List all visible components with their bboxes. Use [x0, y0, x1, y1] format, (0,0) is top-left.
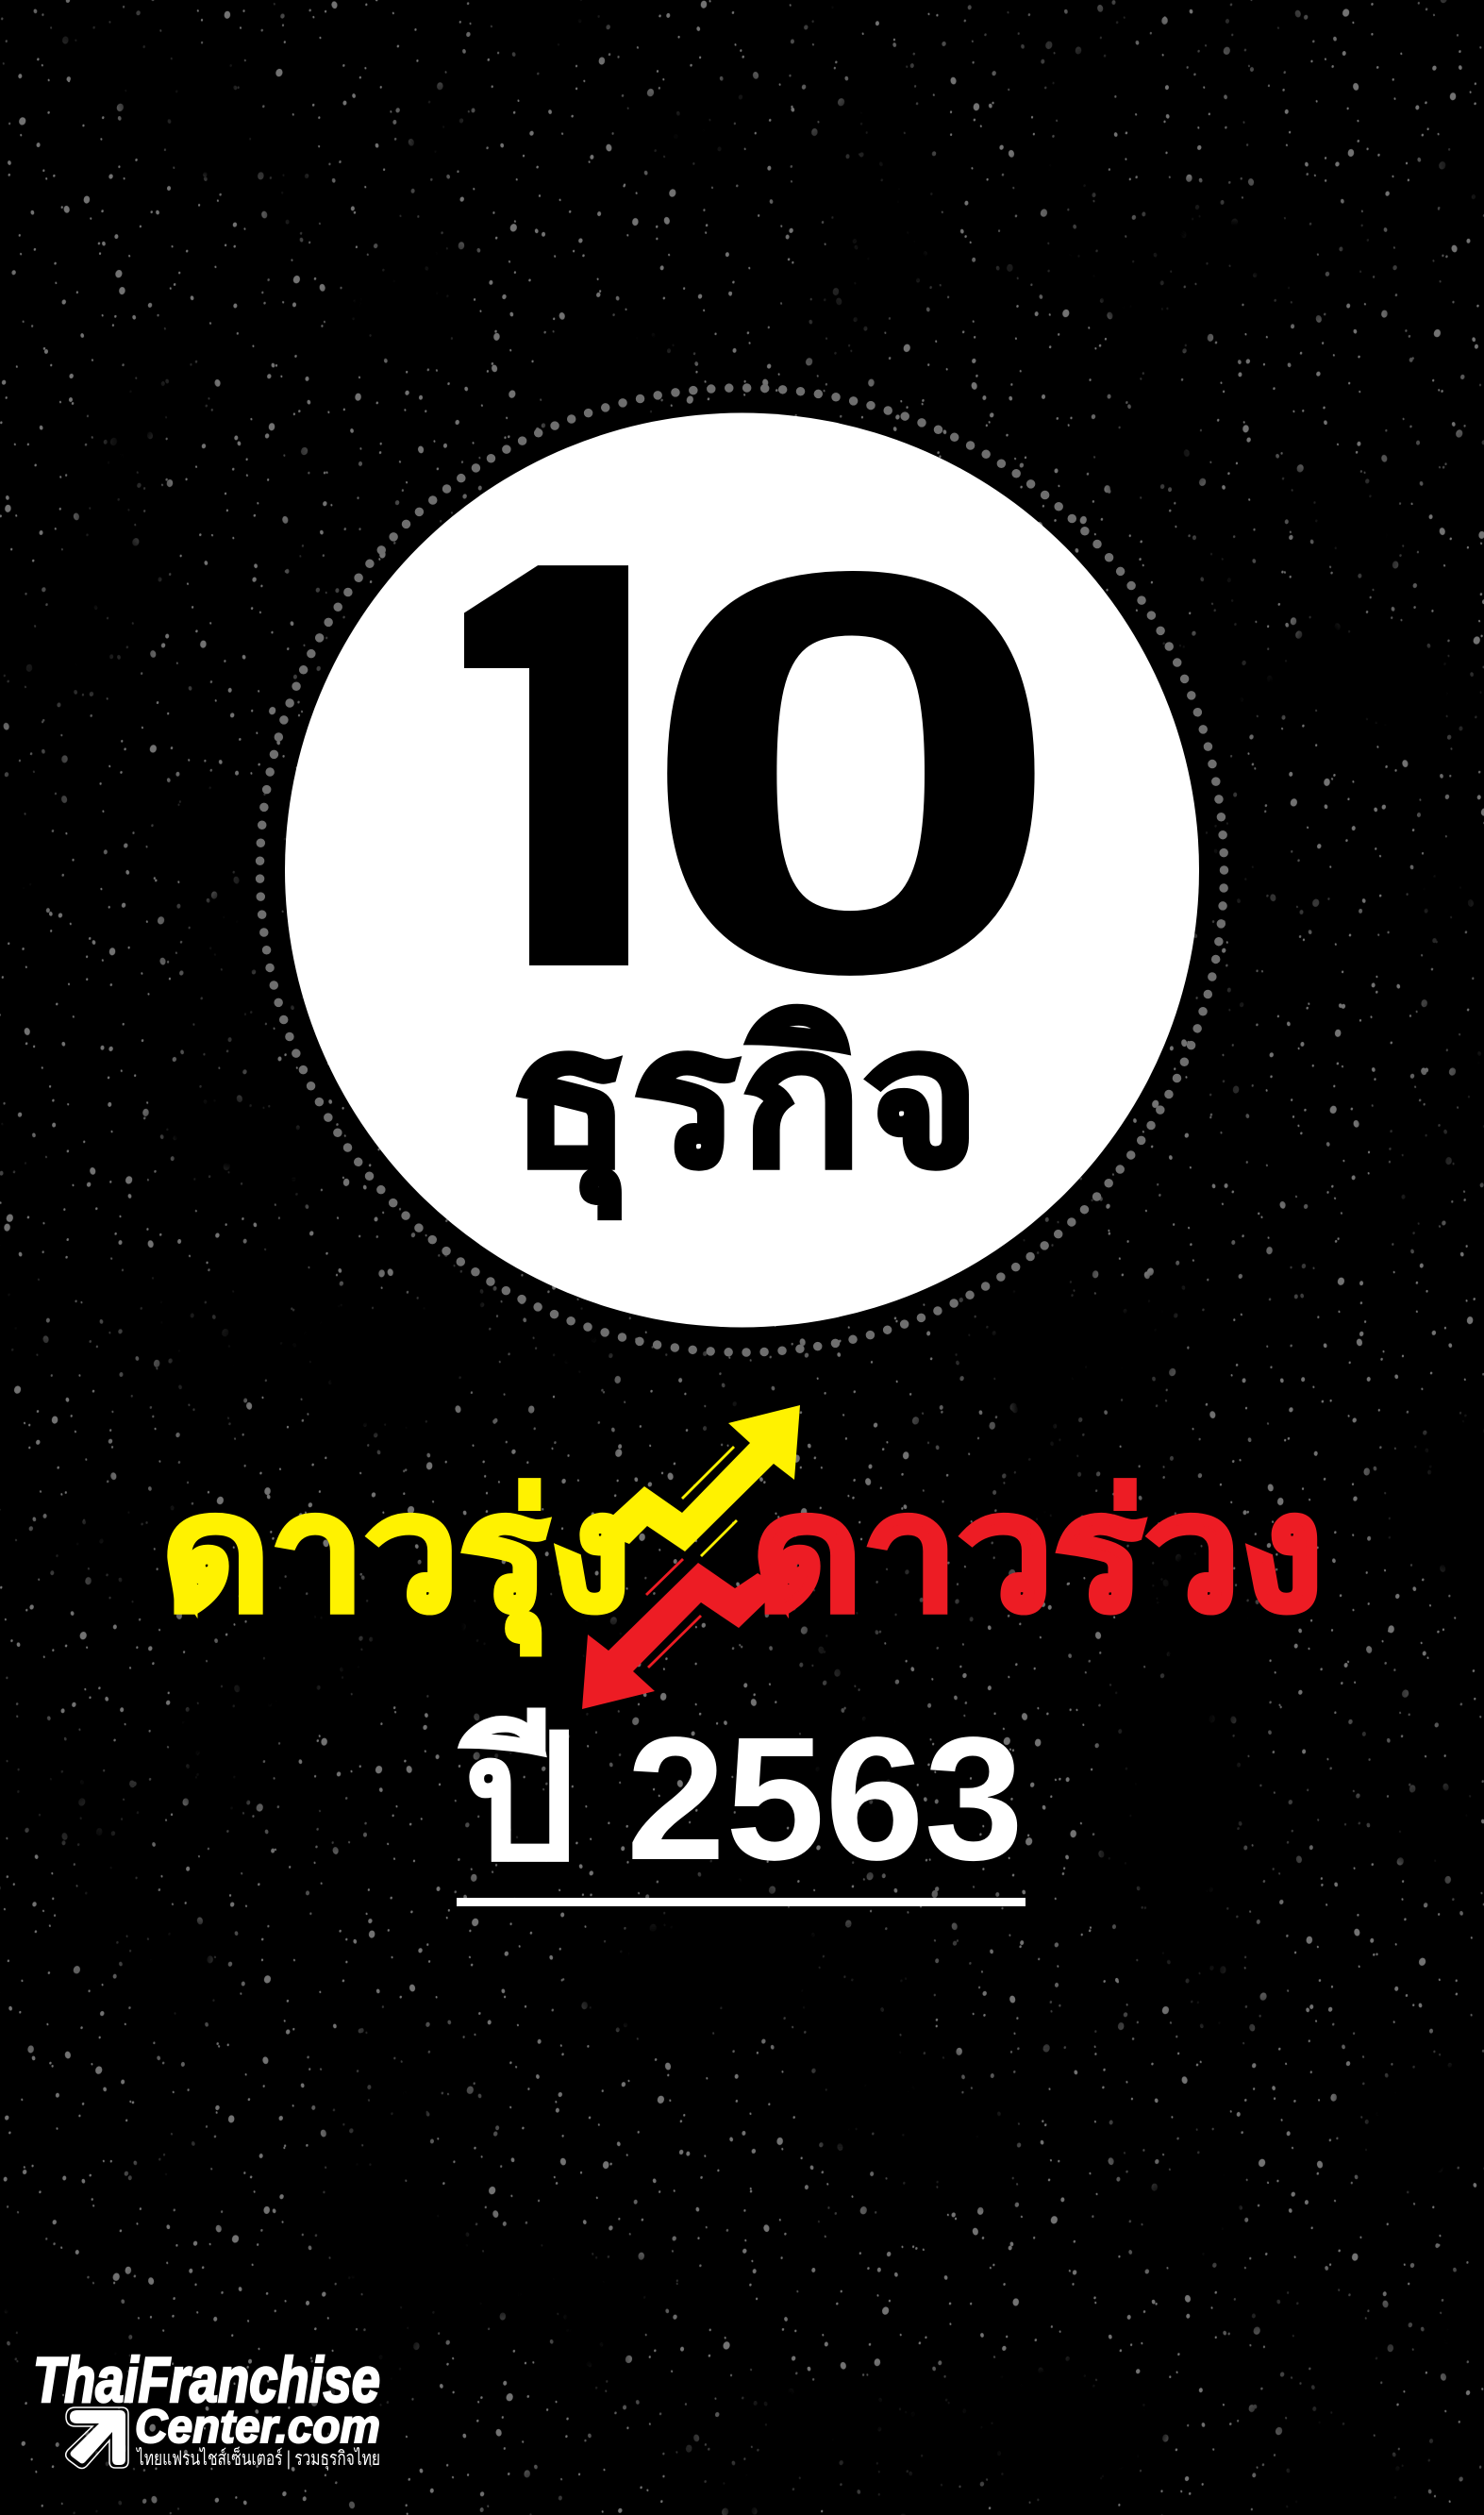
- arrow: yellow rising: [604, 1405, 800, 1557]
- year underline: [457, 1898, 1025, 1906]
- heading: ธุรกิจ: ธุรกิจ: [509, 990, 980, 1218]
- logo wordmark line 2: Center.com: [135, 2400, 380, 2453]
- headline: ดาวร่วง (falling star): ดาวร่วง: [752, 1463, 1324, 1644]
- logo wordmark line 1: ThaiFranchise: [33, 2344, 380, 2416]
- heading number: 10: 0: [640, 457, 1063, 1089]
- logo tagline: ไทยแฟรนไชส์เซ็นเตอร์ | รวมธุรกิจไทย: [136, 2445, 380, 2471]
- arrow: red falling: [582, 1558, 778, 1709]
- white circle badge: [285, 413, 1199, 1327]
- year: ปี 2563: ปี 2563: [457, 1702, 1024, 1897]
- logo: ThaiFranchise Center.com: [33, 2344, 380, 2471]
- dotted ring around circle: [260, 388, 1225, 1352]
- heading number: 10: 1: [416, 471, 710, 1059]
- heading number: 10: [416, 457, 1063, 1089]
- logo arrow icon: [66, 2407, 128, 2469]
- headline: ดาวรุ่ง (rising star): ดาวรุ่ง: [161, 1463, 631, 1654]
